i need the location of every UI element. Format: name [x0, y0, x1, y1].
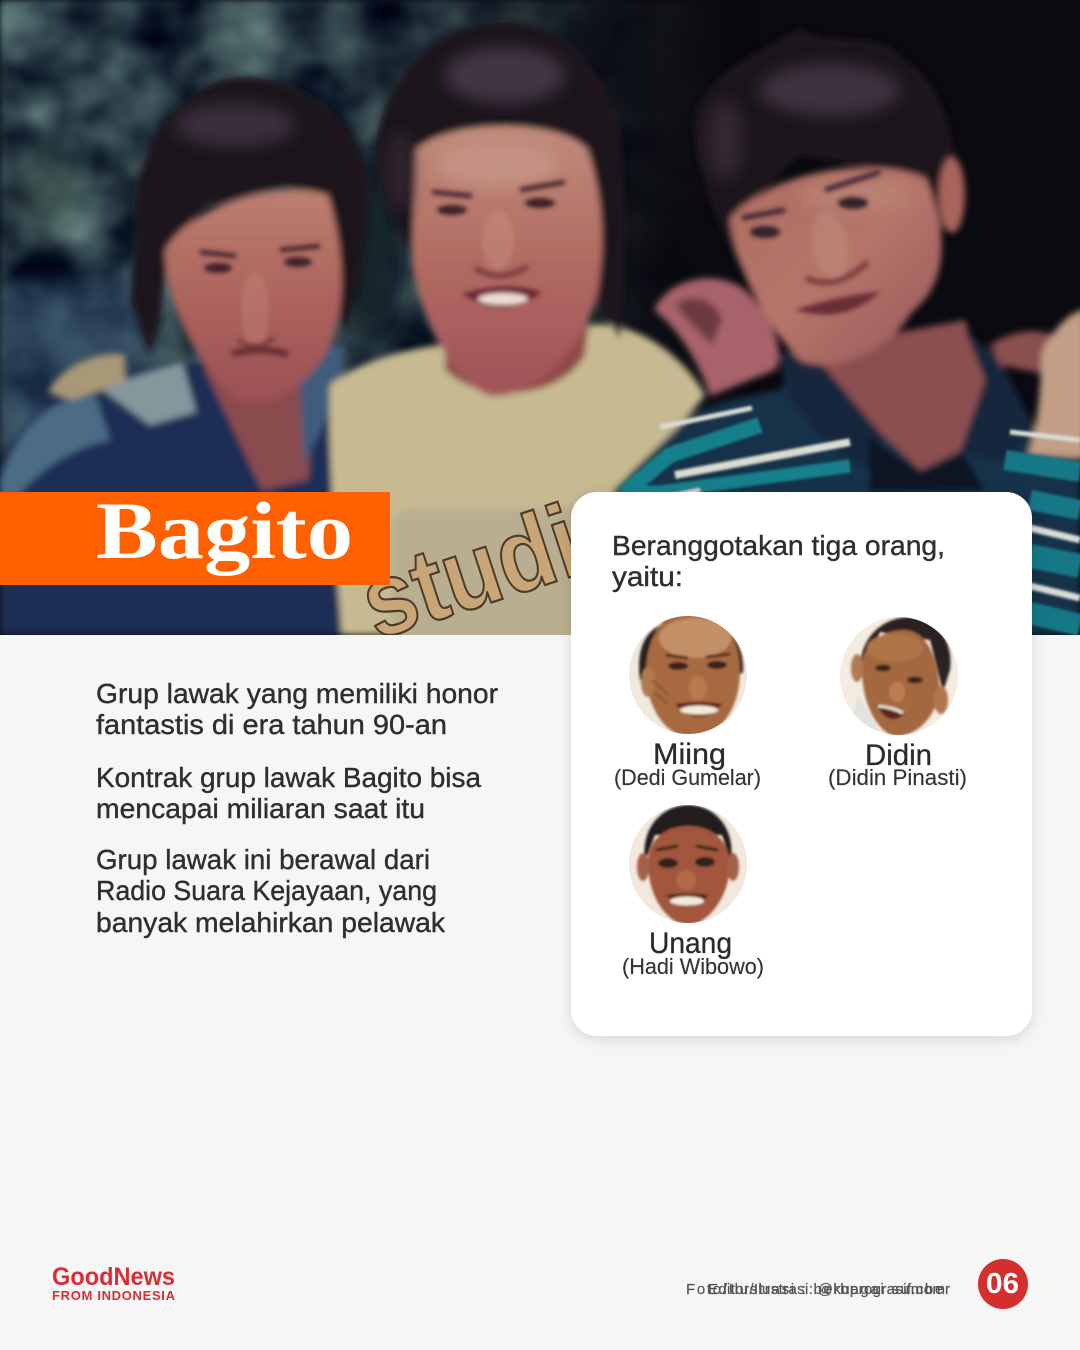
portrait: Didin: [840, 617, 958, 735]
paragraph: honor: [96, 678, 498, 740]
card heading: [612, 530, 945, 592]
paragraph: origin: [96, 844, 446, 938]
panel: members card: [571, 492, 1032, 1036]
name: Miing: (Dedi Gumelar): [614, 765, 761, 790]
page number badge: [978, 1259, 1028, 1309]
paragraph: contract: mencapai miliaran saat itu: [96, 793, 425, 824]
paragraph: origin: banyak melahirkan pelawak: [96, 907, 446, 938]
title banner: [0, 485, 390, 585]
hair highlights: [445, 47, 565, 103]
name: Miing: [614, 738, 761, 790]
hand on shoulder: [654, 278, 779, 396]
middle man: [330, 324, 705, 635]
far right arm: [990, 331, 1060, 375]
portrait: Miing: [629, 616, 747, 734]
footer credits (overlapping): Editor/Ilustrasi: @kuprograsif.com: [708, 1281, 945, 1298]
name: Didin: (Didin Pinasti): [828, 765, 967, 790]
logo: GoodNews from Indonesia: FROM INDONESIA: [52, 1288, 176, 1303]
name: Unang: Unang: [649, 927, 732, 960]
face highlights: [442, 146, 552, 188]
shirt stripes: [628, 425, 760, 490]
right man head and neck: [805, 320, 985, 470]
card heading: yaitu:: [612, 561, 683, 592]
right man shirt: [570, 350, 1080, 635]
title text: Bagito: [96, 485, 353, 576]
paragraph: origin: Radio Suara Kejayaan, yang: [96, 875, 437, 906]
card heading: Beranggotakan tiga orang,: [612, 530, 945, 561]
paragraph: contract: Kontrak grup lawak Bagito bisa: [96, 762, 481, 793]
name: Didin: [828, 739, 967, 790]
paragraph: honor: Grup lawak yang memiliki honor: [96, 678, 498, 709]
footer credits (overlapping): Foto/Ilustrasi : berbagai sumber: [686, 1281, 950, 1298]
text block: facts about Bagito: [96, 678, 498, 938]
logo: GoodNews from Indonesia: [52, 1263, 176, 1303]
name: Unang: [622, 927, 764, 979]
paragraph: contract: [96, 762, 481, 824]
logo: GoodNews from Indonesia: GoodNews: [52, 1263, 175, 1291]
paragraph: origin: Grup lawak ini berawal dari: [96, 844, 430, 875]
photo: three young members of Bagito: [0, 0, 1080, 662]
name: Didin: Didin: [865, 739, 932, 772]
paragraph: honor: fantastis di era tahun 90-an: [96, 709, 447, 740]
left man: [0, 345, 345, 635]
left face features: [241, 272, 269, 348]
name: Unang: (Hadi Wibowo): [622, 954, 764, 979]
page number badge: 06: [986, 1268, 1019, 1300]
middle face features: [482, 210, 514, 270]
shirt logo lettering in the photo: studi: [347, 483, 594, 662]
portrait: Unang: [629, 805, 747, 923]
name: Miing: Miing: [653, 738, 726, 771]
right face features: [812, 213, 847, 280]
